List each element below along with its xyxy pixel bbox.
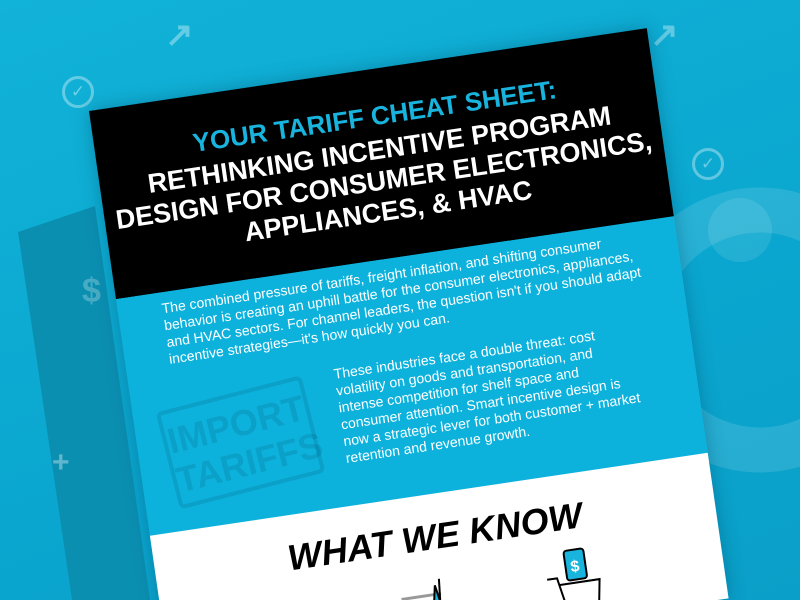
document page (89, 28, 729, 600)
icon: plus: + (52, 446, 70, 479)
text: paragraph 2: These industries face a double threat: cost volatility on goods and transportation, and intense competition for shelf space and consumer attention. Smart incentive design is now a strategic lever for both customer + market retention and revenue growth. (333, 327, 641, 466)
main title: DESIGN FOR CONSUMER ELECTRONICS, (114, 126, 654, 235)
header: black title block (89, 28, 674, 299)
icon: arrow top right: ↗ (650, 16, 678, 54)
icon: cart with price tag (547, 548, 601, 600)
main title: RETHINKING INCENTIVE PROGRAM (146, 100, 613, 199)
panel: intro teal section (116, 216, 708, 536)
icon: cart with price tag: $ (569, 558, 581, 576)
subtitle: YOUR TARIFF CHEAT SHEET: (191, 74, 558, 158)
icon: check circle right: ✓ (701, 154, 715, 173)
icon: check circle left (62, 76, 94, 108)
stamp: import tariffs: IMPORT (163, 387, 309, 462)
icon: arrow top left: ↗ (165, 16, 194, 54)
icon: check circle left: ✓ (71, 82, 85, 101)
text: paragraph 1: The combined pressure of tariffs, freight inflation, and shifting consumer behavior is creating an uphill battle for the consumer electronics, appliances, and HVAC sectors. For channel leaders, the question isn't if you should adapt incentive strategies—it's how quickly you can. (161, 235, 642, 367)
panel: what we know (150, 453, 729, 600)
stamp: import tariffs (156, 375, 325, 510)
icon: chart arrow (401, 578, 442, 600)
icon: dollar: $ (82, 272, 101, 310)
icon: check circle right (692, 148, 724, 180)
stamp: import tariffs: TARIFFS (172, 424, 327, 501)
main title: APPLIANCES, & HVAC (242, 175, 534, 247)
heading: WHAT WE KNOW (285, 494, 585, 578)
